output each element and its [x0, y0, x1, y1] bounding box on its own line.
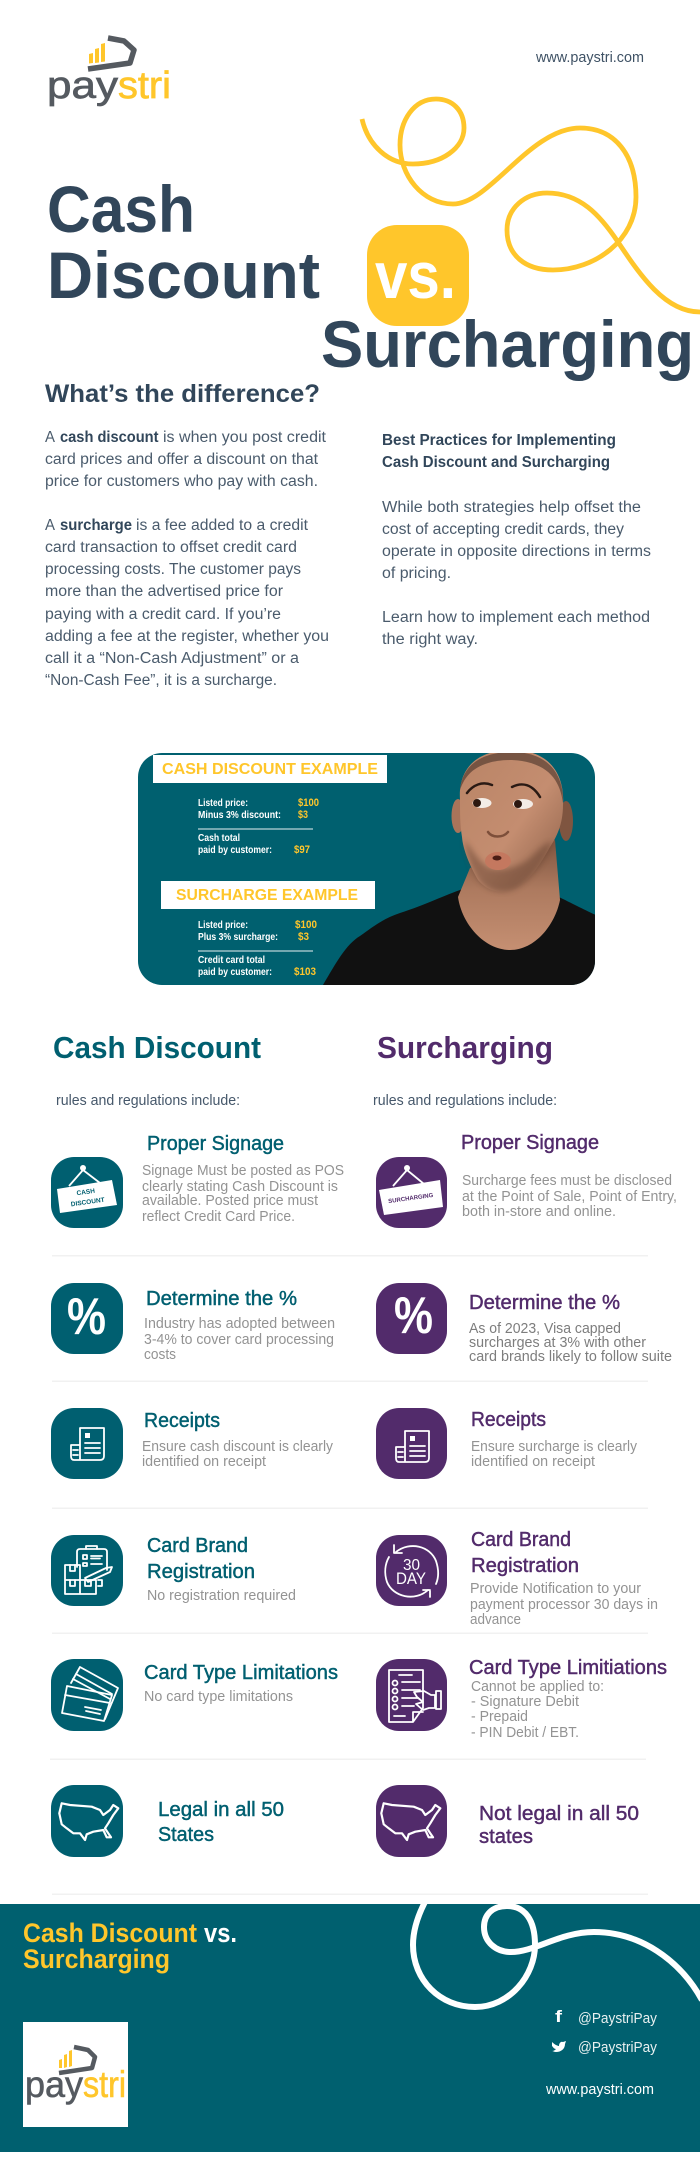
- icon: surcharging sign: SURCHARGING: [388, 1193, 434, 1205]
- text block: definitions: adding a fee at the register, whether you: [45, 628, 329, 645]
- icon: checklist and hand: [376, 1659, 447, 1731]
- text block: definitions: price for customers who pay with cash.: [45, 473, 318, 490]
- text block: best practices: Learn how to implement each method: [382, 609, 650, 626]
- row: receipts, cash discount: Ensure cash discount is clearly: [142, 1439, 334, 1455]
- row: receipts, surcharging: Ensure surcharge is clearly: [471, 1439, 638, 1455]
- row: card brand registration, surcharging: [376, 1529, 658, 1628]
- row: card type limitations, surcharging: Card Type Limitiations: [469, 1657, 667, 1679]
- surcharge calculation: [198, 919, 317, 978]
- cash discount calculation: $3: [298, 809, 308, 821]
- row: proper signage, cash discount: clearly stating Cash Discount is: [142, 1179, 338, 1195]
- row: card brand registration, cash discount: [51, 1535, 296, 1606]
- icon: 30 day notice: 30: [403, 1557, 420, 1574]
- logo: paystri header: pay: [47, 65, 118, 107]
- text block: definitions: [45, 429, 329, 689]
- heading: surcharging column: Surcharging: [377, 1030, 553, 1065]
- social: facebook: f: [555, 2007, 562, 2026]
- row: card type limitations, surcharging: [376, 1657, 667, 1741]
- icon: 30 day notice: DAY: [396, 1569, 426, 1588]
- title: Discount: [47, 238, 320, 312]
- footer title: vs.: [204, 1918, 237, 1948]
- row: proper signage, surcharging: [376, 1132, 677, 1228]
- row: card brand registration, cash discount: Registration: [147, 1561, 255, 1583]
- row: receipts, cash discount: identified on receipt: [142, 1454, 266, 1470]
- cash discount calculation: $97: [294, 844, 310, 856]
- title: Surcharging: [321, 307, 694, 381]
- icon: cash discount sign: CASH: [76, 1188, 96, 1197]
- row: card type limitations, cash discount: No card type limitations: [144, 1689, 293, 1705]
- row: proper signage, cash discount: Signage Must be posted as POS: [142, 1163, 344, 1179]
- title: [47, 172, 694, 381]
- surcharge calculation: paid by customer:: [198, 966, 272, 978]
- icon: clipboard and boxes: [51, 1535, 123, 1606]
- text block: definitions: “Non-Cash Fee”, it is a surcharge.: [45, 672, 277, 689]
- icon: receipt: [376, 1408, 447, 1479]
- row: receipts, surcharging: Receipts: [471, 1409, 546, 1431]
- social: facebook: @PaystriPay: [578, 2011, 658, 2027]
- row: proper signage, cash discount: Proper Signage: [147, 1133, 284, 1155]
- subheading left: rules and regulations include:: [56, 1093, 240, 1109]
- text block: definitions: A: [45, 517, 56, 534]
- title: Cash: [47, 172, 195, 246]
- row: card brand registration, surcharging: Card Brand: [471, 1529, 571, 1551]
- row: card type limitations, surcharging: - Signature Debit: [471, 1694, 579, 1710]
- social: facebook: [555, 2007, 658, 2027]
- row: determine the percent, surcharging: As of 2023, Visa capped: [469, 1321, 621, 1337]
- cash discount calculation: Listed price:: [198, 797, 248, 809]
- row: card brand registration, surcharging: advance: [470, 1612, 521, 1628]
- cash discount calculation: $100: [298, 797, 319, 809]
- social: twitter: @PaystriPay: [578, 2040, 658, 2056]
- row: legal in all states, cash discount: [51, 1785, 284, 1857]
- row: proper signage, cash discount: [51, 1133, 344, 1228]
- text block: best practices: Best Practices for Implementing: [382, 432, 616, 449]
- text block: best practices: of pricing.: [382, 565, 451, 582]
- icon: percent: [51, 1283, 123, 1354]
- subheading right: rules and regulations include:: [373, 1093, 557, 1109]
- text block: definitions: cash discount: [60, 429, 158, 446]
- row: card type limitations, surcharging: - PIN Debit / EBT.: [471, 1725, 579, 1741]
- icon: credit cards: [51, 1659, 123, 1731]
- icon: cash discount sign: [51, 1157, 123, 1228]
- website link: www.paystri.com: [545, 2082, 654, 2098]
- surcharge calculation: $103: [294, 966, 316, 978]
- icon: US map: [51, 1785, 123, 1857]
- panel: pricing example card: [138, 750, 600, 990]
- row: card type limitations, surcharging: - Prepaid: [471, 1709, 528, 1725]
- row: determine the percent, cash discount: Industry has adopted between: [144, 1316, 335, 1332]
- text block: definitions: paying with a credit card. If you’re: [45, 606, 281, 623]
- decorative yellow squiggle: [362, 99, 700, 312]
- text block: definitions: is when you post credit: [163, 429, 327, 446]
- row: card brand registration, surcharging: Provide Notification to your: [470, 1581, 641, 1597]
- cash discount calculation: Cash total: [198, 832, 240, 844]
- text block: definitions: processing costs. The customer pays: [45, 561, 301, 578]
- icon: percent: %: [394, 1287, 433, 1345]
- row: receipts, cash discount: Receipts: [144, 1410, 220, 1432]
- text block: definitions: card prices and offer a discount on that: [45, 451, 319, 468]
- icon: surcharging sign: [376, 1157, 447, 1228]
- surcharge calculation: $100: [295, 919, 317, 931]
- label box: cash discount example: [153, 755, 387, 783]
- label box: surcharge example: [161, 881, 375, 909]
- icon: cash discount sign: DISCOUNT: [70, 1197, 105, 1208]
- decorative white swirl: [413, 1900, 700, 2007]
- text block: best practices: While both strategies help offset the: [382, 499, 641, 516]
- footer title: Cash Discount: [23, 1918, 197, 1948]
- label box: cash discount example: CASH DISCOUNT EXAMPLE: [162, 761, 378, 778]
- text block: definitions: surcharge: [60, 517, 132, 534]
- text block: definitions: is a fee added to a credit: [136, 517, 309, 534]
- row: card brand registration, cash discount: Card Brand: [147, 1535, 248, 1557]
- badge: vs.: [367, 225, 469, 326]
- text block: best practices: operate in opposite directions in terms: [382, 543, 651, 560]
- surcharge calculation: $3: [298, 931, 309, 943]
- label box: surcharge example: SURCHARGE EXAMPLE: [176, 887, 358, 904]
- cash discount calculation: Minus 3% discount:: [198, 809, 281, 821]
- row: receipts, surcharging: [376, 1408, 638, 1479]
- row: proper signage, surcharging: Proper Signage: [461, 1132, 599, 1154]
- logo: paystri header: [47, 38, 171, 107]
- row: card type limitations, cash discount: [51, 1659, 338, 1731]
- panel: footer: [0, 1900, 700, 2152]
- row: proper signage, cash discount: available. Posted price must: [142, 1193, 318, 1209]
- text block: definitions: more than the advertised price for: [45, 583, 283, 600]
- row: not legal in all states, surcharging: [376, 1785, 639, 1857]
- row: not legal in all states, surcharging: states: [479, 1826, 533, 1848]
- row: determine the percent, cash discount: 3-4% to cover card processing: [144, 1332, 334, 1348]
- row: proper signage, cash discount: reflect Credit Card Price.: [142, 1209, 295, 1225]
- icon: 30 day notice: [376, 1535, 447, 1606]
- footer title: Surcharging: [23, 1944, 170, 1974]
- row: card type limitations, cash discount: Card Type Limitations: [144, 1662, 338, 1684]
- row: card brand registration, cash discount: No registration required: [147, 1588, 296, 1604]
- text block: definitions: call it a “Non-Cash Adjustment” or a: [45, 650, 299, 667]
- row: determine the percent, surcharging: card brands likely to follow suite: [469, 1349, 672, 1365]
- footer title: [23, 1918, 237, 1974]
- row: not legal in all states, surcharging: Not legal in all 50: [479, 1803, 639, 1825]
- icon: US map: [376, 1785, 447, 1857]
- row: determine the percent, cash discount: costs: [144, 1347, 176, 1363]
- website link: www.paystri.com: [535, 50, 644, 66]
- cash discount calculation: paid by customer:: [198, 844, 272, 856]
- heading: what's the difference: What’s the difference?: [45, 380, 320, 408]
- surcharge calculation: Plus 3% surcharge:: [198, 931, 278, 943]
- badge: vs.: vs.: [375, 238, 456, 312]
- row: receipts, surcharging: identified on receipt: [471, 1454, 595, 1470]
- photo: surprised man: [320, 750, 600, 990]
- row: receipts, cash discount: [51, 1408, 334, 1479]
- icon: receipt: [51, 1408, 123, 1479]
- logo: paystri footer: [23, 2022, 128, 2127]
- text block: best practices: Cash Discount and Surcharging: [382, 454, 610, 471]
- row: proper signage, surcharging: at the Point of Sale, Point of Entry,: [462, 1189, 677, 1205]
- icon: percent: %: [67, 1288, 106, 1346]
- row: proper signage, surcharging: Surcharge fees must be disclosed: [462, 1173, 672, 1189]
- text block: best practices: the right way.: [382, 631, 478, 648]
- row: determine the percent, cash discount: Determine the %: [146, 1288, 297, 1310]
- heading: cash discount column: Cash Discount: [53, 1030, 261, 1065]
- text block: best practices: cost of accepting credit cards, they: [382, 521, 624, 538]
- logo: paystri footer: stri: [83, 2064, 126, 2105]
- row: card brand registration, surcharging: payment processor 30 days in: [470, 1597, 658, 1613]
- text block: definitions: A: [45, 429, 56, 446]
- logo: paystri header: stri: [118, 65, 171, 107]
- logo: paystri footer: pay: [25, 2064, 83, 2105]
- row: determine the percent, cash discount: [51, 1283, 335, 1363]
- row: determine the percent, surcharging: Determine the %: [469, 1292, 620, 1314]
- row: card brand registration, surcharging: Registration: [471, 1555, 579, 1577]
- row: determine the percent, surcharging: [376, 1283, 672, 1365]
- row: legal in all states, cash discount: States: [158, 1824, 214, 1846]
- row: proper signage, surcharging: both in-store and online.: [462, 1204, 616, 1220]
- row: legal in all states, cash discount: Legal in all 50: [158, 1799, 284, 1821]
- icon: percent: [376, 1283, 447, 1354]
- surcharge calculation: Credit card total: [198, 954, 265, 966]
- text block: best practices: [382, 432, 651, 648]
- surcharge calculation: Listed price:: [198, 919, 248, 931]
- text block: definitions: card transaction to offset credit card: [45, 539, 297, 556]
- cash discount calculation: [198, 797, 319, 856]
- row: card type limitations, surcharging: Cannot be applied to:: [471, 1679, 604, 1695]
- row: determine the percent, surcharging: surcharges at 3% with other: [469, 1335, 646, 1351]
